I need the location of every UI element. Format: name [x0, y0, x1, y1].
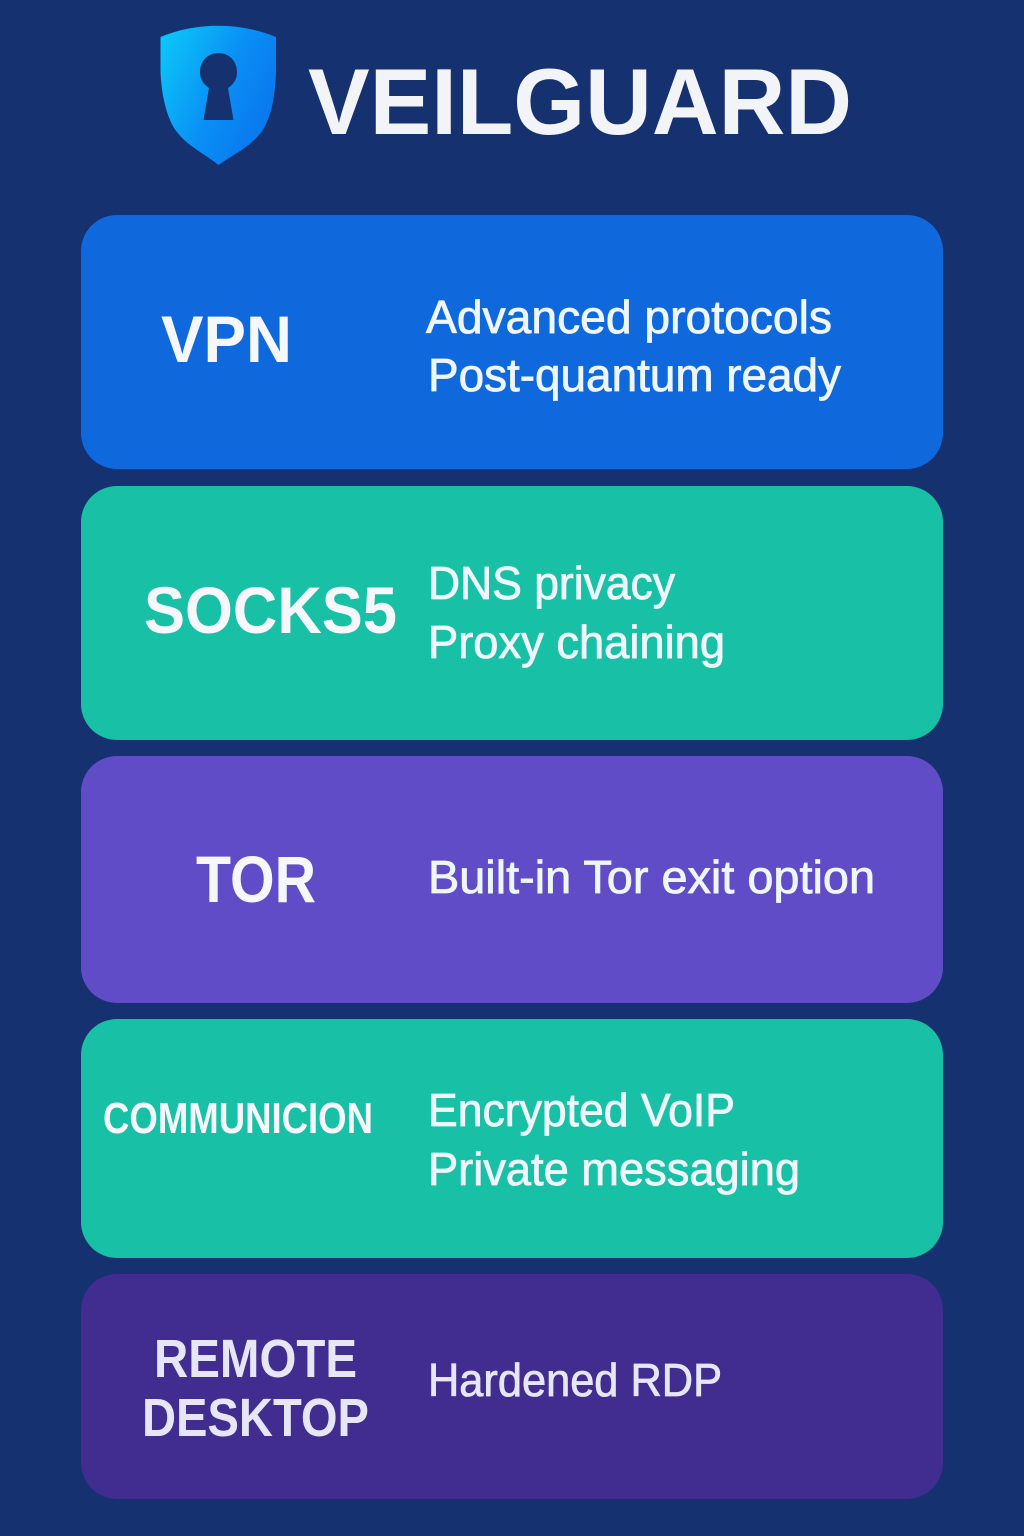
feature list: SOCKS5: Proxy chaining: [428, 616, 725, 668]
feature list: VPN: [426, 291, 841, 401]
panel label: VPN: VPN: [161, 302, 292, 376]
logo: shield with keyhole: [160, 26, 276, 165]
feature list: SOCKS5: [428, 557, 725, 668]
panel label: SOCKS5: SOCKS5: [144, 573, 397, 647]
panel label: REMOTE DESKTOP: DESKTOP: [142, 1388, 369, 1448]
feature list: VPN: Post-quantum ready: [428, 349, 841, 401]
feature text: remote desktop: Hardened RDP: [428, 1354, 722, 1406]
panel: VPN: [81, 215, 943, 469]
panel: remote desktop: [81, 1274, 943, 1499]
feature list: communication: Encrypted VoIP: [428, 1084, 735, 1136]
panel label: COMMUNICION: COMMUNICION: [103, 1094, 373, 1143]
panel label: REMOTE DESKTOP: REMOTE: [154, 1329, 357, 1389]
feature list: communication: Private messaging: [428, 1143, 800, 1195]
feature text: TOR: Built-in Tor exit option: [428, 851, 875, 903]
panel label: REMOTE DESKTOP: [142, 1329, 369, 1448]
panel: SOCKS5: [81, 486, 943, 740]
feature list: communication: [428, 1084, 800, 1195]
panel: communication: [81, 1019, 943, 1258]
feature list: SOCKS5: DNS privacy: [428, 557, 675, 609]
panel label: TOR: TOR: [196, 842, 316, 916]
feature list: VPN: Advanced protocols: [426, 291, 832, 343]
title: VEILGUARD: [308, 49, 852, 154]
panel: TOR: [81, 756, 943, 1003]
